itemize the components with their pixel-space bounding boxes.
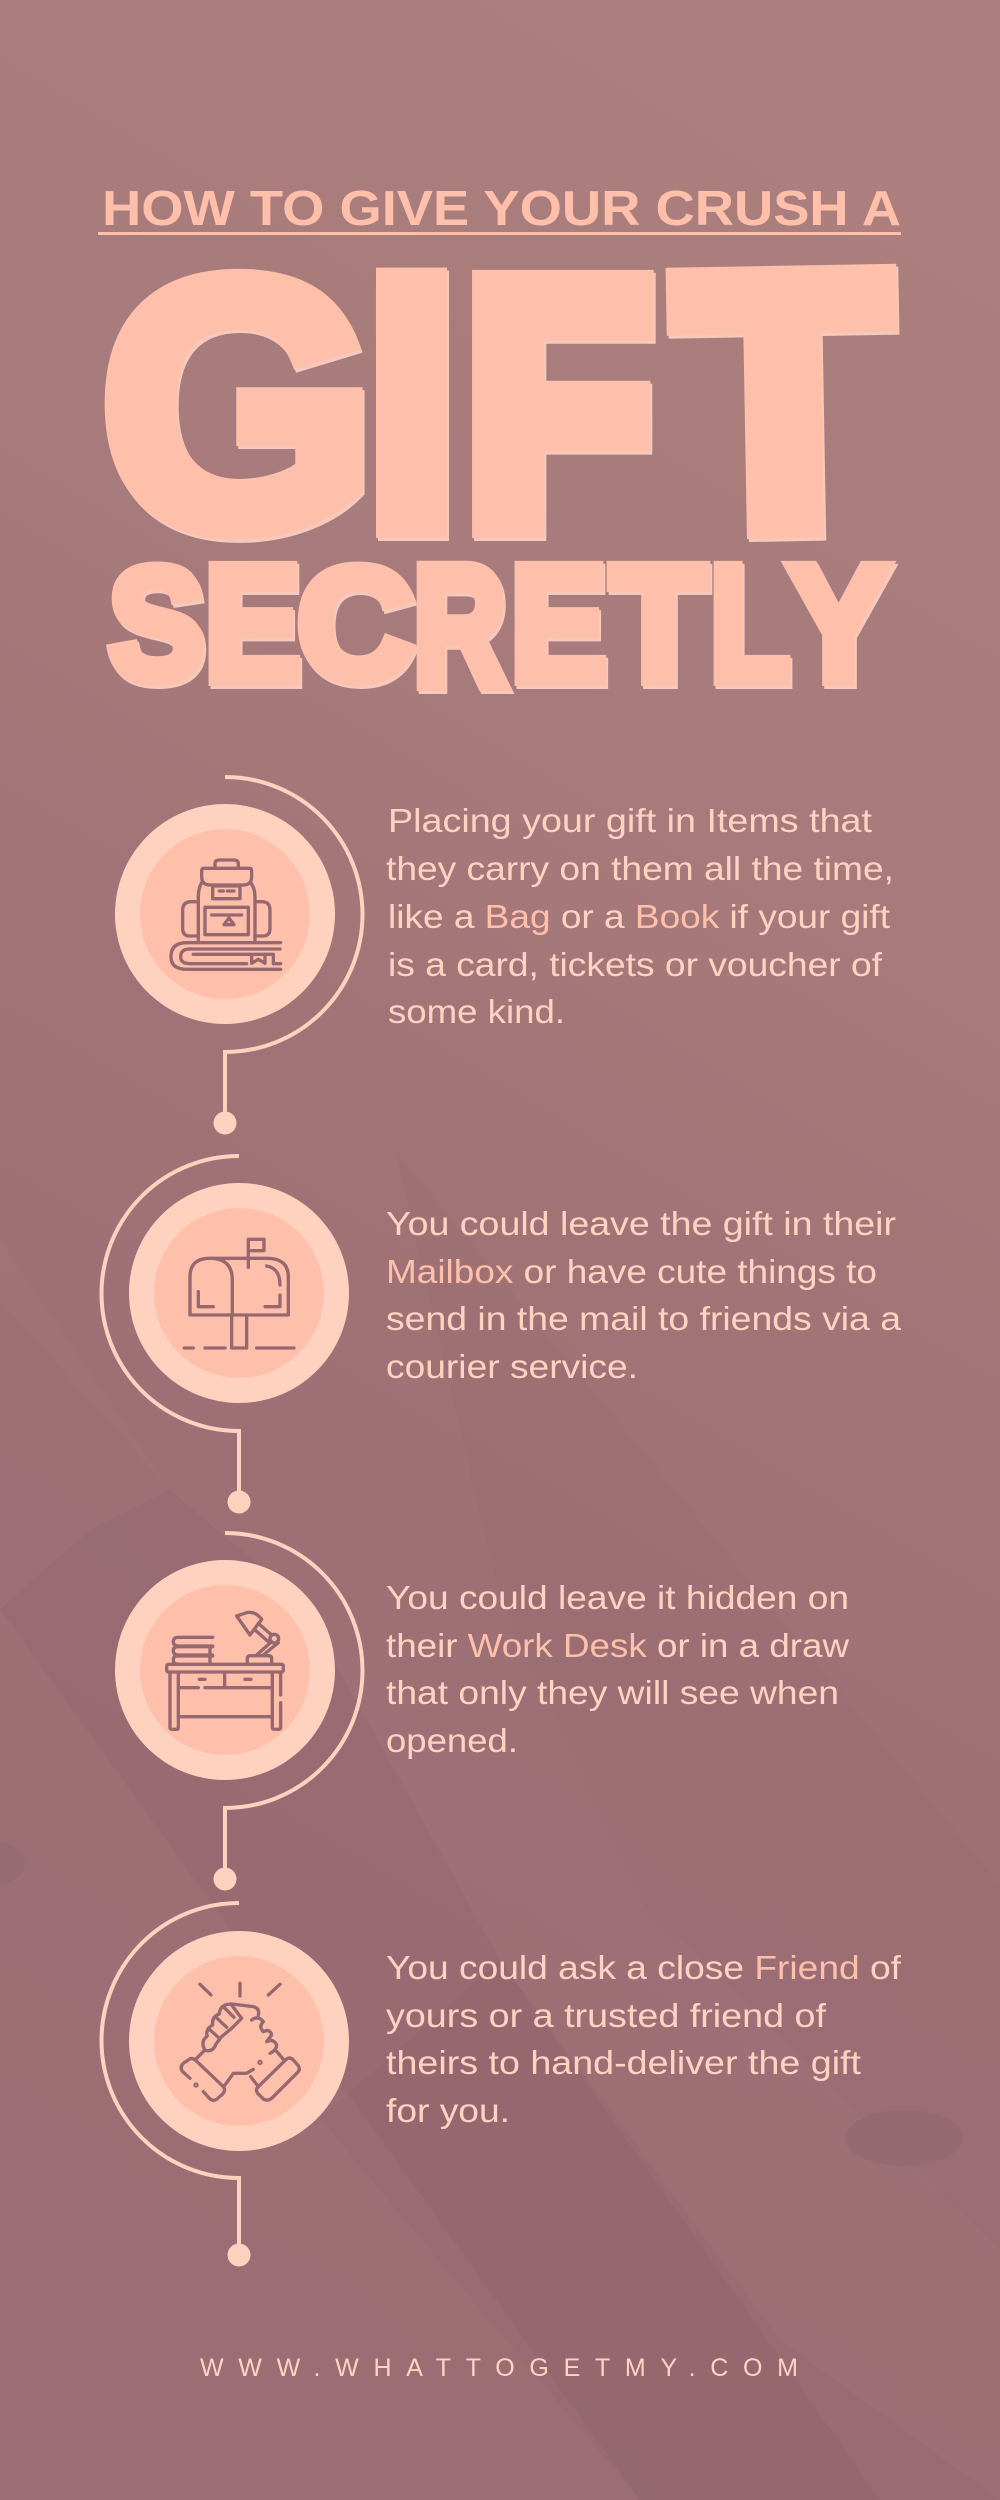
circle inner 2 xyxy=(154,1208,324,1378)
step 2: mailbox xyxy=(102,1156,349,1514)
step 1 text: some kind. xyxy=(388,993,565,1030)
title: secretly: R xyxy=(413,531,506,720)
step 3 text: opened. xyxy=(386,1722,518,1759)
connector dot 2 xyxy=(228,1490,250,1514)
step 4 text xyxy=(386,1949,902,2129)
step 2 text: courier service. xyxy=(386,1348,638,1385)
title: secretly: E xyxy=(511,533,606,715)
connector arc 2 xyxy=(102,1156,239,1502)
connector dot 4 xyxy=(228,2244,250,2266)
step 1 text: Placing your gift in Items that xyxy=(388,802,872,839)
title: secretly: C xyxy=(297,535,413,712)
icon: mailbox xyxy=(184,1239,294,1348)
connector arc 3 xyxy=(225,1533,362,1879)
footer url: WWW.WHATTOGETMY.COM xyxy=(200,2354,798,2382)
circle inner 1 xyxy=(140,829,310,999)
title: secretly: Y xyxy=(787,531,889,715)
circle badge 1 xyxy=(115,804,335,1024)
title: gift: G xyxy=(101,206,374,601)
title: secretly: L xyxy=(710,533,789,715)
step 1: bag and book xyxy=(115,777,362,1134)
step 2 text xyxy=(386,1205,902,1385)
heading: how to give your crush a: HOW TO GIVE YOUR CRUSH A xyxy=(102,182,901,236)
step 3: work desk xyxy=(115,1533,362,1890)
step 1 text: they carry on them all the time, xyxy=(386,850,894,887)
icon: clasped hands xyxy=(181,1983,299,2100)
step 3 text: their Work Desk or in a draw xyxy=(386,1627,849,1664)
step 2 text: Mailbox or have cute things to xyxy=(386,1253,877,1290)
title: secretly: E xyxy=(205,533,300,715)
heading underline xyxy=(98,232,901,235)
icon: desk with books and lamp xyxy=(167,1612,283,1729)
step 1 text xyxy=(386,802,894,1030)
connector dot 1 xyxy=(214,1112,236,1134)
connector dot 3 xyxy=(214,1868,236,1890)
icon: backpack on book xyxy=(171,860,281,969)
circle badge 2 xyxy=(129,1183,349,1403)
title: secretly: S xyxy=(109,535,204,712)
title: gift: F xyxy=(466,213,650,595)
title: secretly xyxy=(109,531,889,720)
step 3 text: You could leave it hidden on xyxy=(386,1579,849,1616)
step 3 text: that only they will see when xyxy=(386,1674,839,1711)
circle badge 4 xyxy=(129,1931,349,2151)
step 2 text: send in the mail to friends via a xyxy=(386,1300,902,1337)
connector arc 1 xyxy=(225,777,362,1123)
circle inner 4 xyxy=(154,1956,324,2126)
step 1 text: is a card, tickets or voucher of xyxy=(388,946,883,983)
circle badge 3 xyxy=(115,1560,335,1780)
title: gift xyxy=(101,183,892,622)
step 2 text: You could leave the gift in their xyxy=(386,1205,896,1242)
step 4: friend xyxy=(102,1903,349,2266)
title: gift: T xyxy=(674,202,892,602)
circle inner 3 xyxy=(140,1585,310,1755)
step 3 text xyxy=(386,1579,849,1759)
title: gift: I xyxy=(343,183,480,622)
step 4 text: theirs to hand-deliver the gift xyxy=(386,2044,861,2081)
step 4 text: yours or a trusted friend of xyxy=(386,1997,827,2034)
title: secretly: T xyxy=(611,532,706,714)
step 4 text: for you. xyxy=(386,2092,510,2129)
step 1 text: like a Bag or a Book if your gift xyxy=(388,898,890,935)
connector arc 4 xyxy=(102,1903,239,2255)
step 4 text: You could ask a close Friend of xyxy=(386,1949,902,1986)
